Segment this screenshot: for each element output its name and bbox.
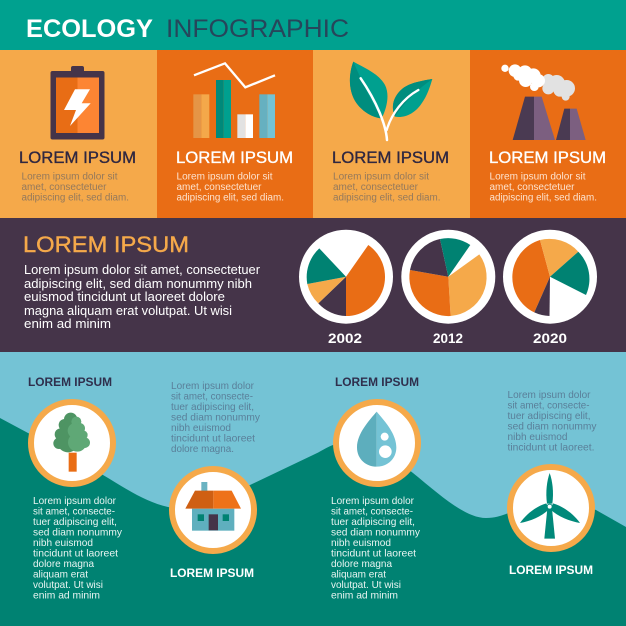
text block: aliquam erat [331, 568, 386, 580]
heading: LOREM IPSUM [509, 565, 593, 577]
text block: dolore magna. [171, 443, 234, 455]
heading: LOREM IPSUM [28, 377, 112, 389]
item: tree [28, 377, 123, 602]
text block: sed diam nonummy [33, 526, 123, 538]
text block: tuer adipiscing elit, [331, 516, 415, 528]
text block: sit amet, consecte- [331, 506, 413, 518]
text block: amet, consectetuer [22, 182, 107, 193]
text block: enim ad minim [331, 590, 398, 602]
text block [176, 172, 284, 204]
heading: LOREM IPSUM [489, 149, 606, 167]
title: INFOGRAPHIC [166, 15, 349, 43]
text block: adipiscing elit, sed diam. [490, 192, 597, 204]
text block: adipiscing elit, sed diam nonummy nibh [24, 277, 252, 291]
text block: aliquam erat [33, 568, 88, 580]
text block: Lorem ipsum dolor sit [333, 172, 429, 182]
title: ECOLOGY [26, 15, 153, 43]
icon: wind turbine [510, 467, 592, 549]
panel: bar chart [157, 50, 313, 218]
text block: amet, consectetuer [176, 182, 262, 193]
heading: LOREM IPSUM [335, 377, 419, 389]
panel: factory [470, 50, 626, 218]
text block: Lorem ipsum dolor sit [22, 172, 118, 182]
panel: landscape [0, 352, 626, 626]
text block: amet, consectetuer [490, 182, 575, 193]
title [26, 15, 349, 43]
text block: tuer adipiscing elit, [171, 401, 254, 413]
text block: enim ad minim [33, 590, 100, 602]
text block: volutpat. Ut wisi [331, 579, 401, 591]
text block: Lorem ipsum dolor sit amet, consectetuer [24, 263, 260, 277]
icon: water drop [336, 402, 418, 484]
year labels: 2020 [533, 330, 567, 346]
text block: sit amet, consecte- [508, 400, 590, 412]
panel: battery [0, 50, 157, 218]
icon: tree [31, 402, 113, 484]
text block: sed diam nonummy [331, 526, 421, 538]
text block: tincidunt ut laoreet. [508, 442, 594, 454]
text block: enim ad minim [24, 317, 111, 331]
year labels [328, 330, 567, 346]
text block: Lorem ipsum dolor sit [490, 172, 586, 182]
text block: tincidunt ut laoreet [331, 548, 416, 560]
text block: adipiscing elit, sed diam. [176, 192, 284, 204]
text block: adipiscing elit, sed diam. [22, 192, 129, 204]
heading: LOREM IPSUM [19, 149, 136, 167]
text block: euismod tincidunt ut laoreet dolore [24, 290, 225, 304]
text block: sed diam nonummy [508, 420, 597, 432]
text block: sed diam nonummy [171, 412, 261, 424]
text block: nibh euismod [331, 537, 391, 549]
text block: tuer adipiscing elit, [508, 410, 590, 422]
text block: dolore magna [33, 558, 94, 570]
heading: LOREM IPSUM [170, 568, 254, 580]
text block [333, 172, 440, 204]
text block: volutpat. Ut wisi [33, 579, 103, 591]
panel: pie charts band [0, 218, 626, 352]
year labels: 2002 [328, 330, 362, 346]
text block: sit amet, consecte- [171, 390, 253, 402]
text block [331, 495, 421, 602]
text block: Lorem ipsum dolor [508, 389, 591, 401]
icon: bar chart with line [193, 63, 275, 138]
text block: Lorem ipsum dolor sit [176, 172, 273, 182]
item: house [170, 380, 261, 580]
icon: leaves [350, 62, 432, 140]
text block: Lorem ipsum dolor [33, 495, 116, 507]
icon: house [172, 469, 254, 551]
pie chart 2002 [299, 230, 393, 324]
icon: factory with smoke [501, 64, 586, 140]
text block: magna aliquam erat volutpat. Ut wisi [24, 304, 232, 318]
text block [171, 380, 261, 455]
text block: tuer adipiscing elit, [33, 516, 117, 528]
icon: battery [50, 66, 104, 140]
heading: LOREM IPSUM [332, 149, 449, 167]
text block: adipiscing elit, sed diam. [333, 192, 440, 204]
text block [490, 172, 597, 204]
text block: Lorem ipsum dolor [171, 380, 254, 392]
item: wind turbine [508, 389, 597, 577]
header bar [0, 0, 626, 50]
pie chart 2012 [401, 230, 495, 324]
text block: Lorem ipsum dolor [331, 495, 414, 507]
text block: nibh euismod [171, 422, 231, 434]
panel: plant [313, 50, 470, 218]
text block [508, 389, 597, 454]
year labels: 2012 [433, 330, 463, 346]
heading: LOREM IPSUM [23, 232, 189, 257]
heading: LOREM IPSUM [176, 149, 293, 167]
text block: tincidunt ut laoreet [33, 548, 118, 560]
pie chart 2020 [503, 230, 597, 324]
text block: nibh euismod [33, 537, 93, 549]
text block: amet, consectetuer [333, 182, 419, 193]
item: water [331, 377, 421, 602]
text block: sit amet, consecte- [33, 506, 115, 518]
wave background [0, 418, 626, 626]
text block [22, 172, 129, 204]
text block [24, 263, 260, 331]
text block: dolore magna [331, 558, 392, 570]
text block: tincidunt ut laoreet [171, 432, 255, 444]
text block [33, 495, 123, 602]
text block: nibh euismod [508, 431, 568, 443]
